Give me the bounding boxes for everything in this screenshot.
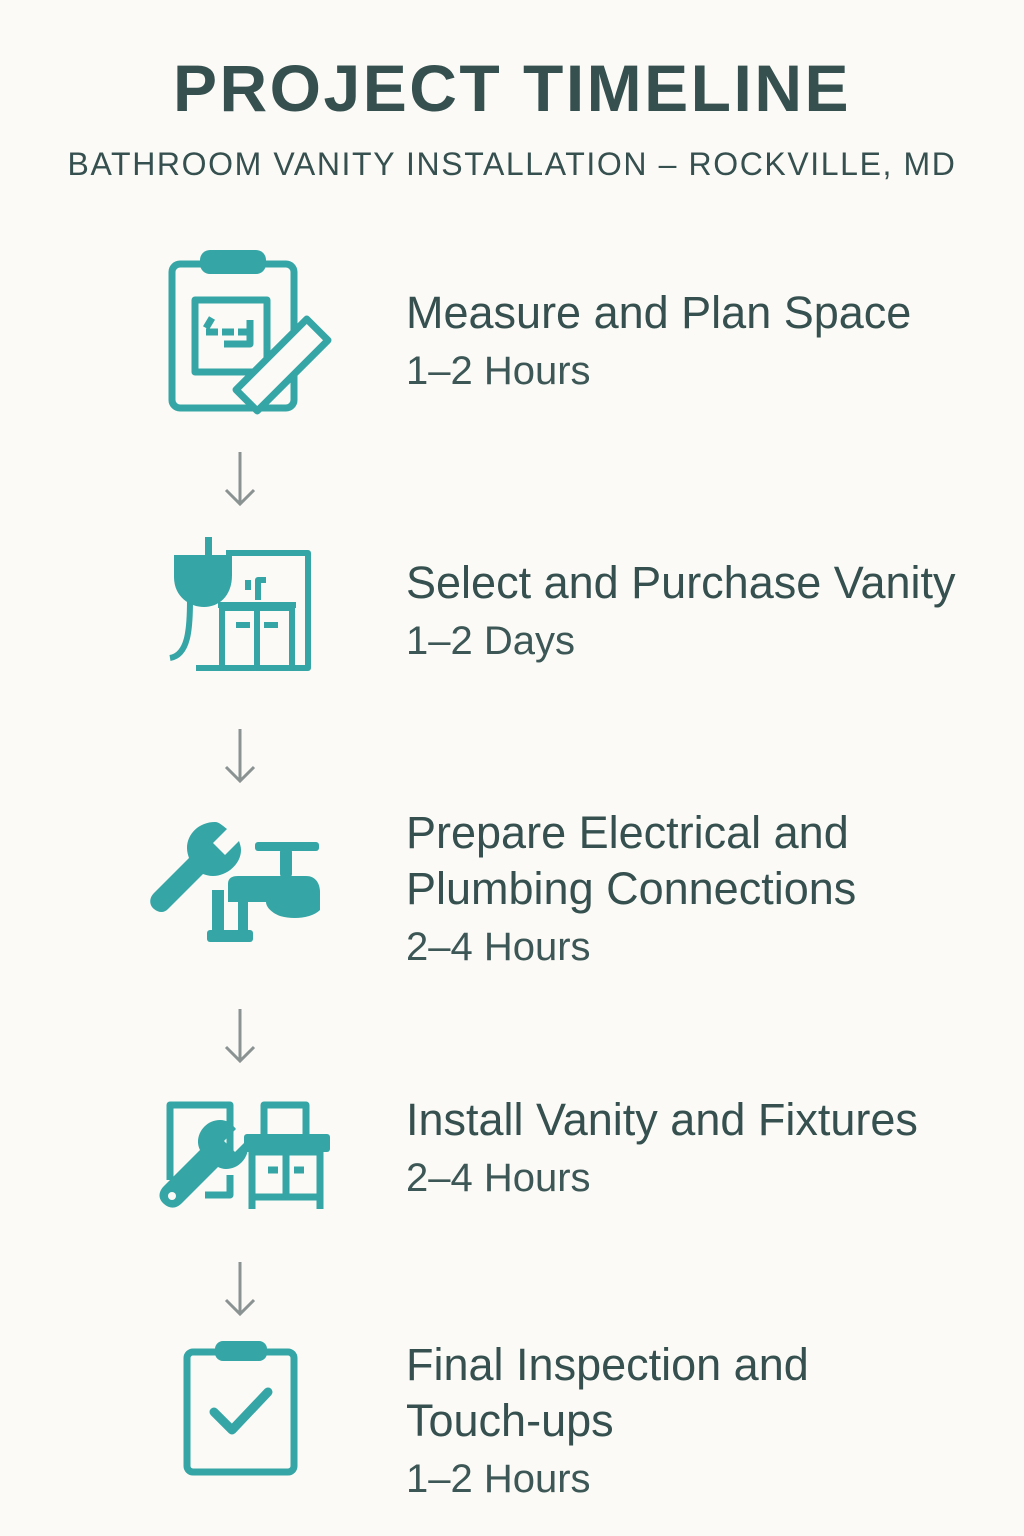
subtitle: BATHROOM VANITY INSTALLATION – ROCKVILLE, MD: [68, 146, 956, 182]
arrow 1: [225, 452, 255, 506]
icon: checklist clipboard: [184, 1341, 298, 1476]
icon: wrench and faucet: [150, 822, 320, 942]
step 4 text: [406, 1094, 918, 1200]
step 4 text: Install Vanity and Fixtures: [406, 1094, 918, 1145]
step 1 text: Measure and Plan Space: [406, 287, 911, 338]
icon: clipboard with ruler: [168, 250, 332, 414]
title: PROJECT TIMELINE: [173, 51, 851, 125]
arrow 4: [225, 1262, 255, 1316]
step 3 text: Plumbing Connections: [406, 863, 856, 914]
step 5 text: Touch-ups: [406, 1395, 614, 1446]
step 1 text: 1–2 Hours: [406, 349, 591, 393]
step 3 text: Prepare Electrical and: [406, 807, 849, 858]
step 1 text: [406, 287, 911, 393]
step 3 text: 2–4 Hours: [406, 925, 591, 969]
step 5 text: [406, 1339, 809, 1501]
arrow 3: [225, 1009, 255, 1063]
step 2 text: [406, 557, 956, 663]
step 2 text: 1–2 Days: [406, 619, 575, 663]
step 5 text: 1–2 Hours: [406, 1457, 591, 1501]
icon: plug and vanity: [170, 537, 311, 671]
arrow 2: [225, 729, 255, 783]
icon: wrench and vanity cabinet: [160, 1102, 330, 1209]
step 2 text: Select and Purchase Vanity: [406, 557, 956, 608]
step 4 text: 2–4 Hours: [406, 1156, 591, 1200]
step 3 text: [406, 807, 856, 969]
step 5 text: Final Inspection and: [406, 1339, 809, 1390]
